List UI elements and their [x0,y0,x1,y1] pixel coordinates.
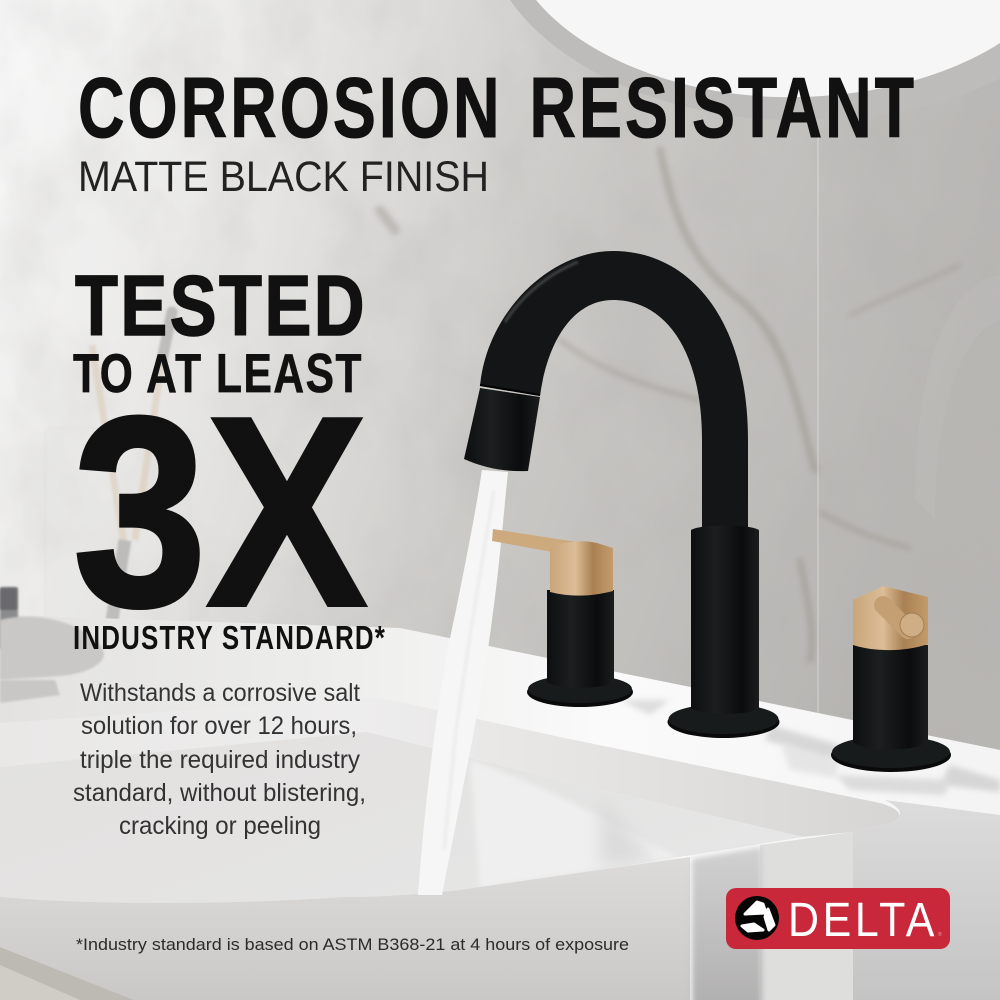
logo: Delta [726,888,950,949]
body text: standard, without blistering, [73,779,366,807]
floor [0,947,134,1000]
counter shadows [620,700,1000,795]
body text: solution for over 12 hours, [81,712,357,740]
icon: Delta triangle mark [735,896,779,940]
headline: to at least: TO AT LEAST [73,342,363,404]
headline: industry standard: INDUSTRY STANDARD* [73,619,386,656]
subtitle: MATTE BLACK FINISH [78,153,489,201]
body text: triple the required industry [80,746,360,774]
sink rim band [0,698,899,837]
blurred towel and dark object [0,587,104,703]
blurred toothbrushes and glass [45,312,190,628]
mirror [510,0,1000,120]
faucet spout [464,251,748,535]
headline: tested: TESTED [75,259,367,354]
right handle [831,586,951,772]
wordmark: DELTA [788,894,938,947]
headline: 3X: 3X [73,362,368,663]
left handle [492,529,633,707]
footnote: *Industry standard is based on ASTM B368-21 at 4 hours of exposure [76,935,629,954]
spout head [464,388,540,471]
body text [73,679,366,840]
faucet center base [668,526,780,738]
background: marble wall [0,0,1000,800]
counter top surface [0,615,1000,1000]
body text: cracking or peeling [119,812,321,840]
body text: Withstands a corrosive salt [80,679,360,707]
registered mark: ® [938,931,942,938]
water stream [418,470,508,895]
basin interior [0,732,803,903]
counter and sink [0,615,1000,1000]
front face [0,857,690,1000]
